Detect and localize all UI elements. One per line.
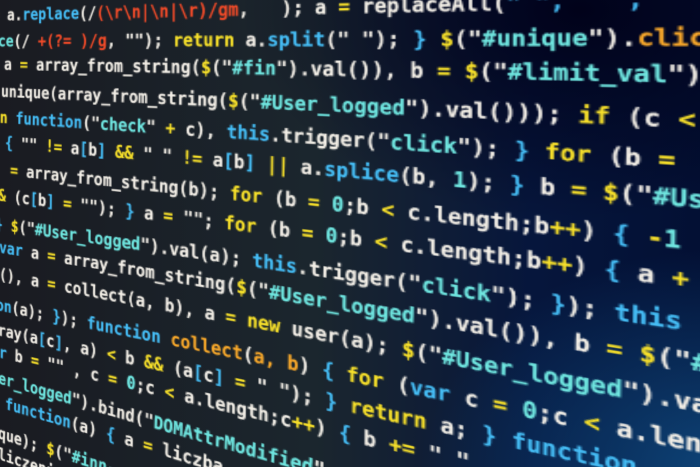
code line 9: var a = array_from_string($("#User_logged").val()), b = $("#	[0, 239, 700, 380]
code line 7: & (c[b] = ""); } a = ""; for (b = 0;b < c.length;b++) { a +	[0, 187, 690, 295]
code line 5: { "" != a[b] && " " != a[b] || a.splice(b, 1); } b = $("#Us	[5, 135, 700, 216]
code line 3: unique(array_from_string($("#User_logged").val())); if (c <	[1, 83, 696, 135]
code line 4: rn function("check" + c), this.trigger("click"); } for (b =	[0, 109, 676, 176]
code line 2: a = array_from_string($("#fin").val()), b = $("#limit_val")	[4, 56, 700, 90]
code line 8: } $("#User_logged").val(a); this.trigger("click"); }); this	[0, 216, 682, 337]
code line 6: = array_from_string(b); for (b = 0;b < c.length;b++) { -1	[10, 162, 681, 256]
